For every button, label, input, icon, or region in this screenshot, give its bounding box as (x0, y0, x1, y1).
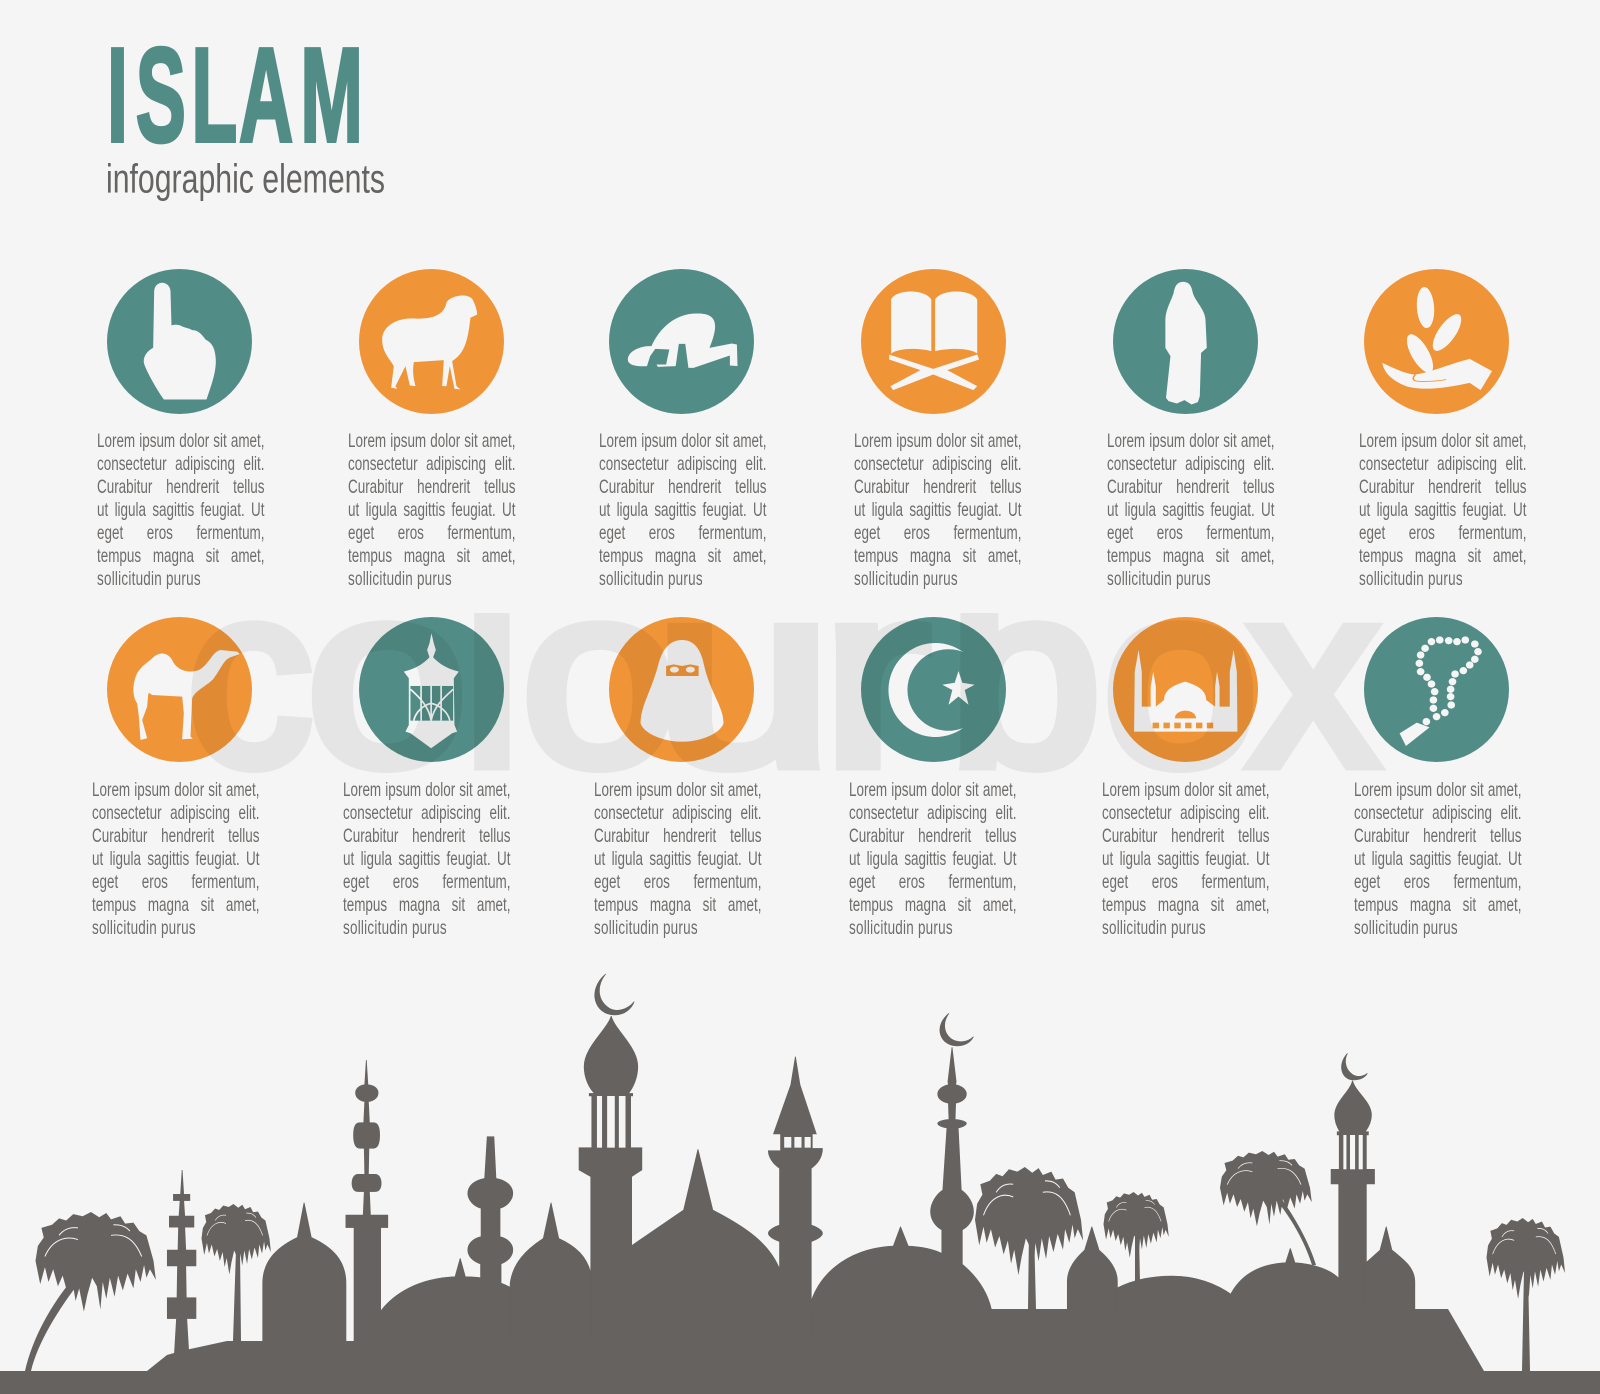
text block: ut ligula sagittis feugiat. Ut (1107, 498, 1274, 520)
icon: open book on stand (861, 269, 1006, 414)
text block (1354, 778, 1522, 938)
right dome (1365, 1227, 1415, 1309)
text block: tempus magna sit amet, (849, 894, 1016, 916)
text block: ut ligula sagittis feugiat. Ut (599, 498, 766, 520)
text block: Lorem ipsum dolor sit amet, (1359, 430, 1526, 452)
icon: coins and hand (1364, 269, 1509, 414)
text block: consectetur adipiscing elit. (1107, 452, 1274, 474)
text block: Curabitur hendrerit tellus (92, 824, 259, 846)
text block (343, 778, 510, 938)
panel: camel (92, 617, 260, 938)
text block: Lorem ipsum dolor sit amet, (97, 430, 264, 452)
text block: tempus magna sit amet, (97, 544, 264, 566)
text block: Lorem ipsum dolor sit amet, (92, 778, 259, 800)
icon: robed figure (1113, 269, 1258, 414)
icon: prayer beads (1364, 617, 1509, 762)
text block (1107, 430, 1274, 590)
text block: eget eros fermentum, (854, 522, 1021, 544)
text block: eget eros fermentum, (92, 870, 259, 892)
text block: sollicitudin purus (849, 916, 953, 938)
icon: mosque (1113, 617, 1258, 762)
text block: Lorem ipsum dolor sit amet, (1107, 430, 1274, 452)
text block (1359, 430, 1526, 590)
text block: Curabitur hendrerit tellus (348, 476, 515, 498)
text block: ut ligula sagittis feugiat. Ut (97, 498, 264, 520)
text block: tempus magna sit amet, (599, 544, 766, 566)
low dome (1116, 1276, 1232, 1309)
text block (1102, 778, 1270, 938)
text block: Curabitur hendrerit tellus (1102, 824, 1269, 846)
text block: eget eros fermentum, (343, 870, 510, 892)
text block: consectetur adipiscing elit. (92, 802, 259, 824)
text block: ut ligula sagittis feugiat. Ut (854, 498, 1021, 520)
text block: tempus magna sit amet, (343, 894, 510, 916)
text block: ut ligula sagittis feugiat. Ut (849, 848, 1016, 870)
minaret: stacked blocks (167, 1170, 196, 1353)
text block: tempus magna sit amet, (594, 894, 761, 916)
crescent (1342, 1053, 1367, 1080)
minaret: balls and cap (346, 1060, 388, 1341)
panel: modest dress (1107, 269, 1274, 590)
palm tree 4 (1104, 1192, 1169, 1282)
text block: eget eros fermentum, (1359, 522, 1526, 544)
text block: ut ligula sagittis feugiat. Ut (348, 498, 515, 520)
text block: sollicitudin purus (92, 916, 196, 938)
text block: Curabitur hendrerit tellus (97, 476, 264, 498)
slender minaret (931, 1047, 973, 1270)
text block (599, 430, 766, 590)
text block (348, 430, 516, 590)
text block: consectetur adipiscing elit. (849, 802, 1016, 824)
small dome (1067, 1227, 1117, 1309)
text block: Lorem ipsum dolor sit amet, (594, 778, 761, 800)
text block: Lorem ipsum dolor sit amet, (1354, 778, 1521, 800)
icon: crescent and star (861, 617, 1006, 762)
panel: lantern (343, 617, 510, 938)
text block: eget eros fermentum, (348, 522, 515, 544)
text block: eget eros fermentum, (1354, 870, 1521, 892)
text block: Lorem ipsum dolor sit amet, (854, 430, 1021, 452)
text block: ut ligula sagittis feugiat. Ut (1359, 498, 1526, 520)
text block: sollicitudin purus (1107, 568, 1211, 590)
text block: ut ligula sagittis feugiat. Ut (1354, 848, 1521, 870)
text block: Curabitur hendrerit tellus (1107, 476, 1274, 498)
text block: sollicitudin purus (348, 568, 452, 590)
text block: eget eros fermentum, (1102, 870, 1269, 892)
text block: consectetur adipiscing elit. (348, 452, 515, 474)
text block: sollicitudin purus (343, 916, 447, 938)
text block: consectetur adipiscing elit. (97, 452, 264, 474)
text block: sollicitudin purus (1102, 916, 1206, 938)
palm tree 2 (202, 1204, 271, 1341)
text block: sollicitudin purus (97, 568, 201, 590)
text block: eget eros fermentum, (594, 870, 761, 892)
icon: sheep (359, 269, 504, 414)
text block: Lorem ipsum dolor sit amet, (1102, 778, 1269, 800)
panel: sacrifice (348, 269, 516, 590)
text block (594, 778, 762, 938)
text block: Curabitur hendrerit tellus (849, 824, 1016, 846)
panel: mosque (1102, 617, 1270, 938)
text block: tempus magna sit amet, (348, 544, 515, 566)
text block: sollicitudin purus (1354, 916, 1458, 938)
text block: Lorem ipsum dolor sit amet, (343, 778, 510, 800)
icon: lantern (359, 617, 504, 762)
skyline silhouette (0, 974, 1600, 1394)
text block: eget eros fermentum, (849, 870, 1016, 892)
dome with spire (263, 1203, 346, 1341)
ground and platform (0, 1309, 1600, 1394)
panel: quran (854, 269, 1022, 590)
text block: Curabitur hendrerit tellus (599, 476, 766, 498)
text block: tempus magna sit amet, (92, 894, 259, 916)
palm tree 6 (1486, 1218, 1565, 1371)
panel: crescent (849, 617, 1016, 938)
panel: shahada (97, 269, 264, 590)
palm tree 3 (975, 1167, 1083, 1309)
crescent (940, 1013, 973, 1046)
middle dome (510, 1203, 591, 1341)
watermark (192, 613, 1386, 773)
palm tree 5 (1220, 1151, 1316, 1265)
icon: veiled woman (609, 617, 754, 762)
panel: niqab (594, 617, 762, 938)
dome (1231, 1248, 1339, 1309)
text block: ut ligula sagittis feugiat. Ut (92, 848, 259, 870)
text block (854, 430, 1022, 590)
text block: Curabitur hendrerit tellus (1354, 824, 1521, 846)
text block (849, 778, 1016, 938)
text block: tempus magna sit amet, (1102, 894, 1269, 916)
wide dome (809, 1227, 991, 1309)
text block: sollicitudin purus (594, 916, 698, 938)
text block: consectetur adipiscing elit. (1102, 802, 1269, 824)
text block: tempus magna sit amet, (1359, 544, 1526, 566)
text block: sollicitudin purus (854, 568, 958, 590)
minaret with onion dome (1331, 1081, 1374, 1309)
text block: Lorem ipsum dolor sit amet, (348, 430, 515, 452)
text block: eget eros fermentum, (599, 522, 766, 544)
big minaret with onion dome (579, 1016, 642, 1341)
text block: eget eros fermentum, (97, 522, 264, 544)
tower with two balls (468, 1137, 513, 1290)
crescent (595, 974, 634, 1015)
icon: raised finger (107, 269, 252, 414)
text block: sollicitudin purus (599, 568, 703, 590)
text block: Curabitur hendrerit tellus (594, 824, 761, 846)
text block: Curabitur hendrerit tellus (343, 824, 510, 846)
text block: tempus magna sit amet, (854, 544, 1021, 566)
text block: consectetur adipiscing elit. (343, 802, 510, 824)
text block (97, 430, 264, 590)
text block: consectetur adipiscing elit. (854, 452, 1021, 474)
text block: tempus magna sit amet, (1354, 894, 1521, 916)
text block: ut ligula sagittis feugiat. Ut (1102, 848, 1269, 870)
text block: Curabitur hendrerit tellus (854, 476, 1021, 498)
text block: consectetur adipiscing elit. (599, 452, 766, 474)
icon: camel (107, 617, 252, 762)
panel: prayer (599, 269, 766, 590)
left half buildings (167, 974, 822, 1353)
right half buildings (809, 1013, 1415, 1309)
icon: prostrating person (609, 269, 754, 414)
text block: consectetur adipiscing elit. (594, 802, 761, 824)
panel: prayer beads (1354, 617, 1522, 938)
text block: Lorem ipsum dolor sit amet, (599, 430, 766, 452)
text block: Curabitur hendrerit tellus (1359, 476, 1526, 498)
panel: charity (1359, 269, 1526, 590)
low dome (379, 1258, 510, 1341)
palm tree 1 (25, 1212, 156, 1371)
text block: consectetur adipiscing elit. (1359, 452, 1526, 474)
text block: ut ligula sagittis feugiat. Ut (594, 848, 761, 870)
text block: ut ligula sagittis feugiat. Ut (343, 848, 510, 870)
big dome (591, 1149, 781, 1341)
text block: Lorem ipsum dolor sit amet, (849, 778, 1016, 800)
text block: tempus magna sit amet, (1107, 544, 1274, 566)
lookout tower (768, 1057, 822, 1341)
text block: consectetur adipiscing elit. (1354, 802, 1521, 824)
text block: eget eros fermentum, (1107, 522, 1274, 544)
text block (92, 778, 260, 938)
text block: sollicitudin purus (1359, 568, 1463, 590)
